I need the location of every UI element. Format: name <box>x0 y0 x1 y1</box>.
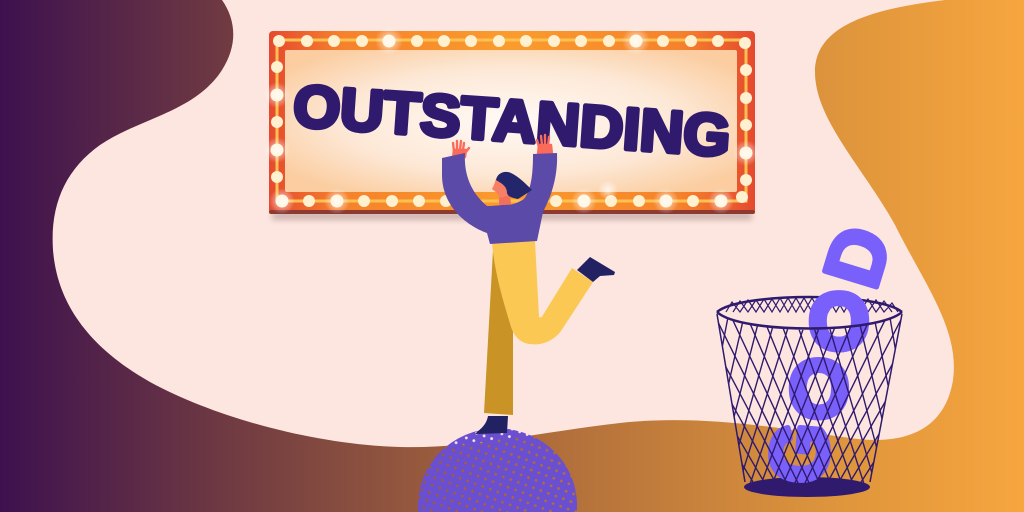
bulbs <box>270 34 752 208</box>
bulb string <box>277 40 746 201</box>
wastebasket with letters <box>716 228 903 497</box>
pale background blob <box>53 0 954 447</box>
back leg <box>484 250 513 415</box>
basket front mesh <box>719 318 900 483</box>
sign shadow <box>272 212 752 220</box>
basket back mesh <box>726 298 898 312</box>
raised shoe <box>577 257 615 282</box>
left hand <box>453 141 469 158</box>
sign frame <box>269 31 755 214</box>
standing shoe <box>475 416 508 434</box>
basket floor <box>744 477 870 497</box>
letter O lower: O <box>789 344 849 433</box>
right hand <box>537 135 552 154</box>
sweater <box>442 153 557 244</box>
basket front rim <box>717 312 902 328</box>
sign panel <box>285 50 737 192</box>
halftone ball <box>418 428 577 512</box>
front leg <box>492 241 593 344</box>
marquee sign <box>264 27 759 220</box>
woman character <box>442 135 615 434</box>
letter G: G <box>753 419 846 487</box>
hair <box>496 172 532 199</box>
letter D: D <box>806 216 908 297</box>
neck <box>499 190 511 206</box>
letter O upper: O <box>809 277 869 365</box>
basket back rim <box>717 297 902 312</box>
basket sides <box>717 314 902 482</box>
bulb halos <box>264 27 759 214</box>
face <box>492 178 510 198</box>
sign word: OUTSTANDING: OUTSTANDING <box>291 73 733 169</box>
